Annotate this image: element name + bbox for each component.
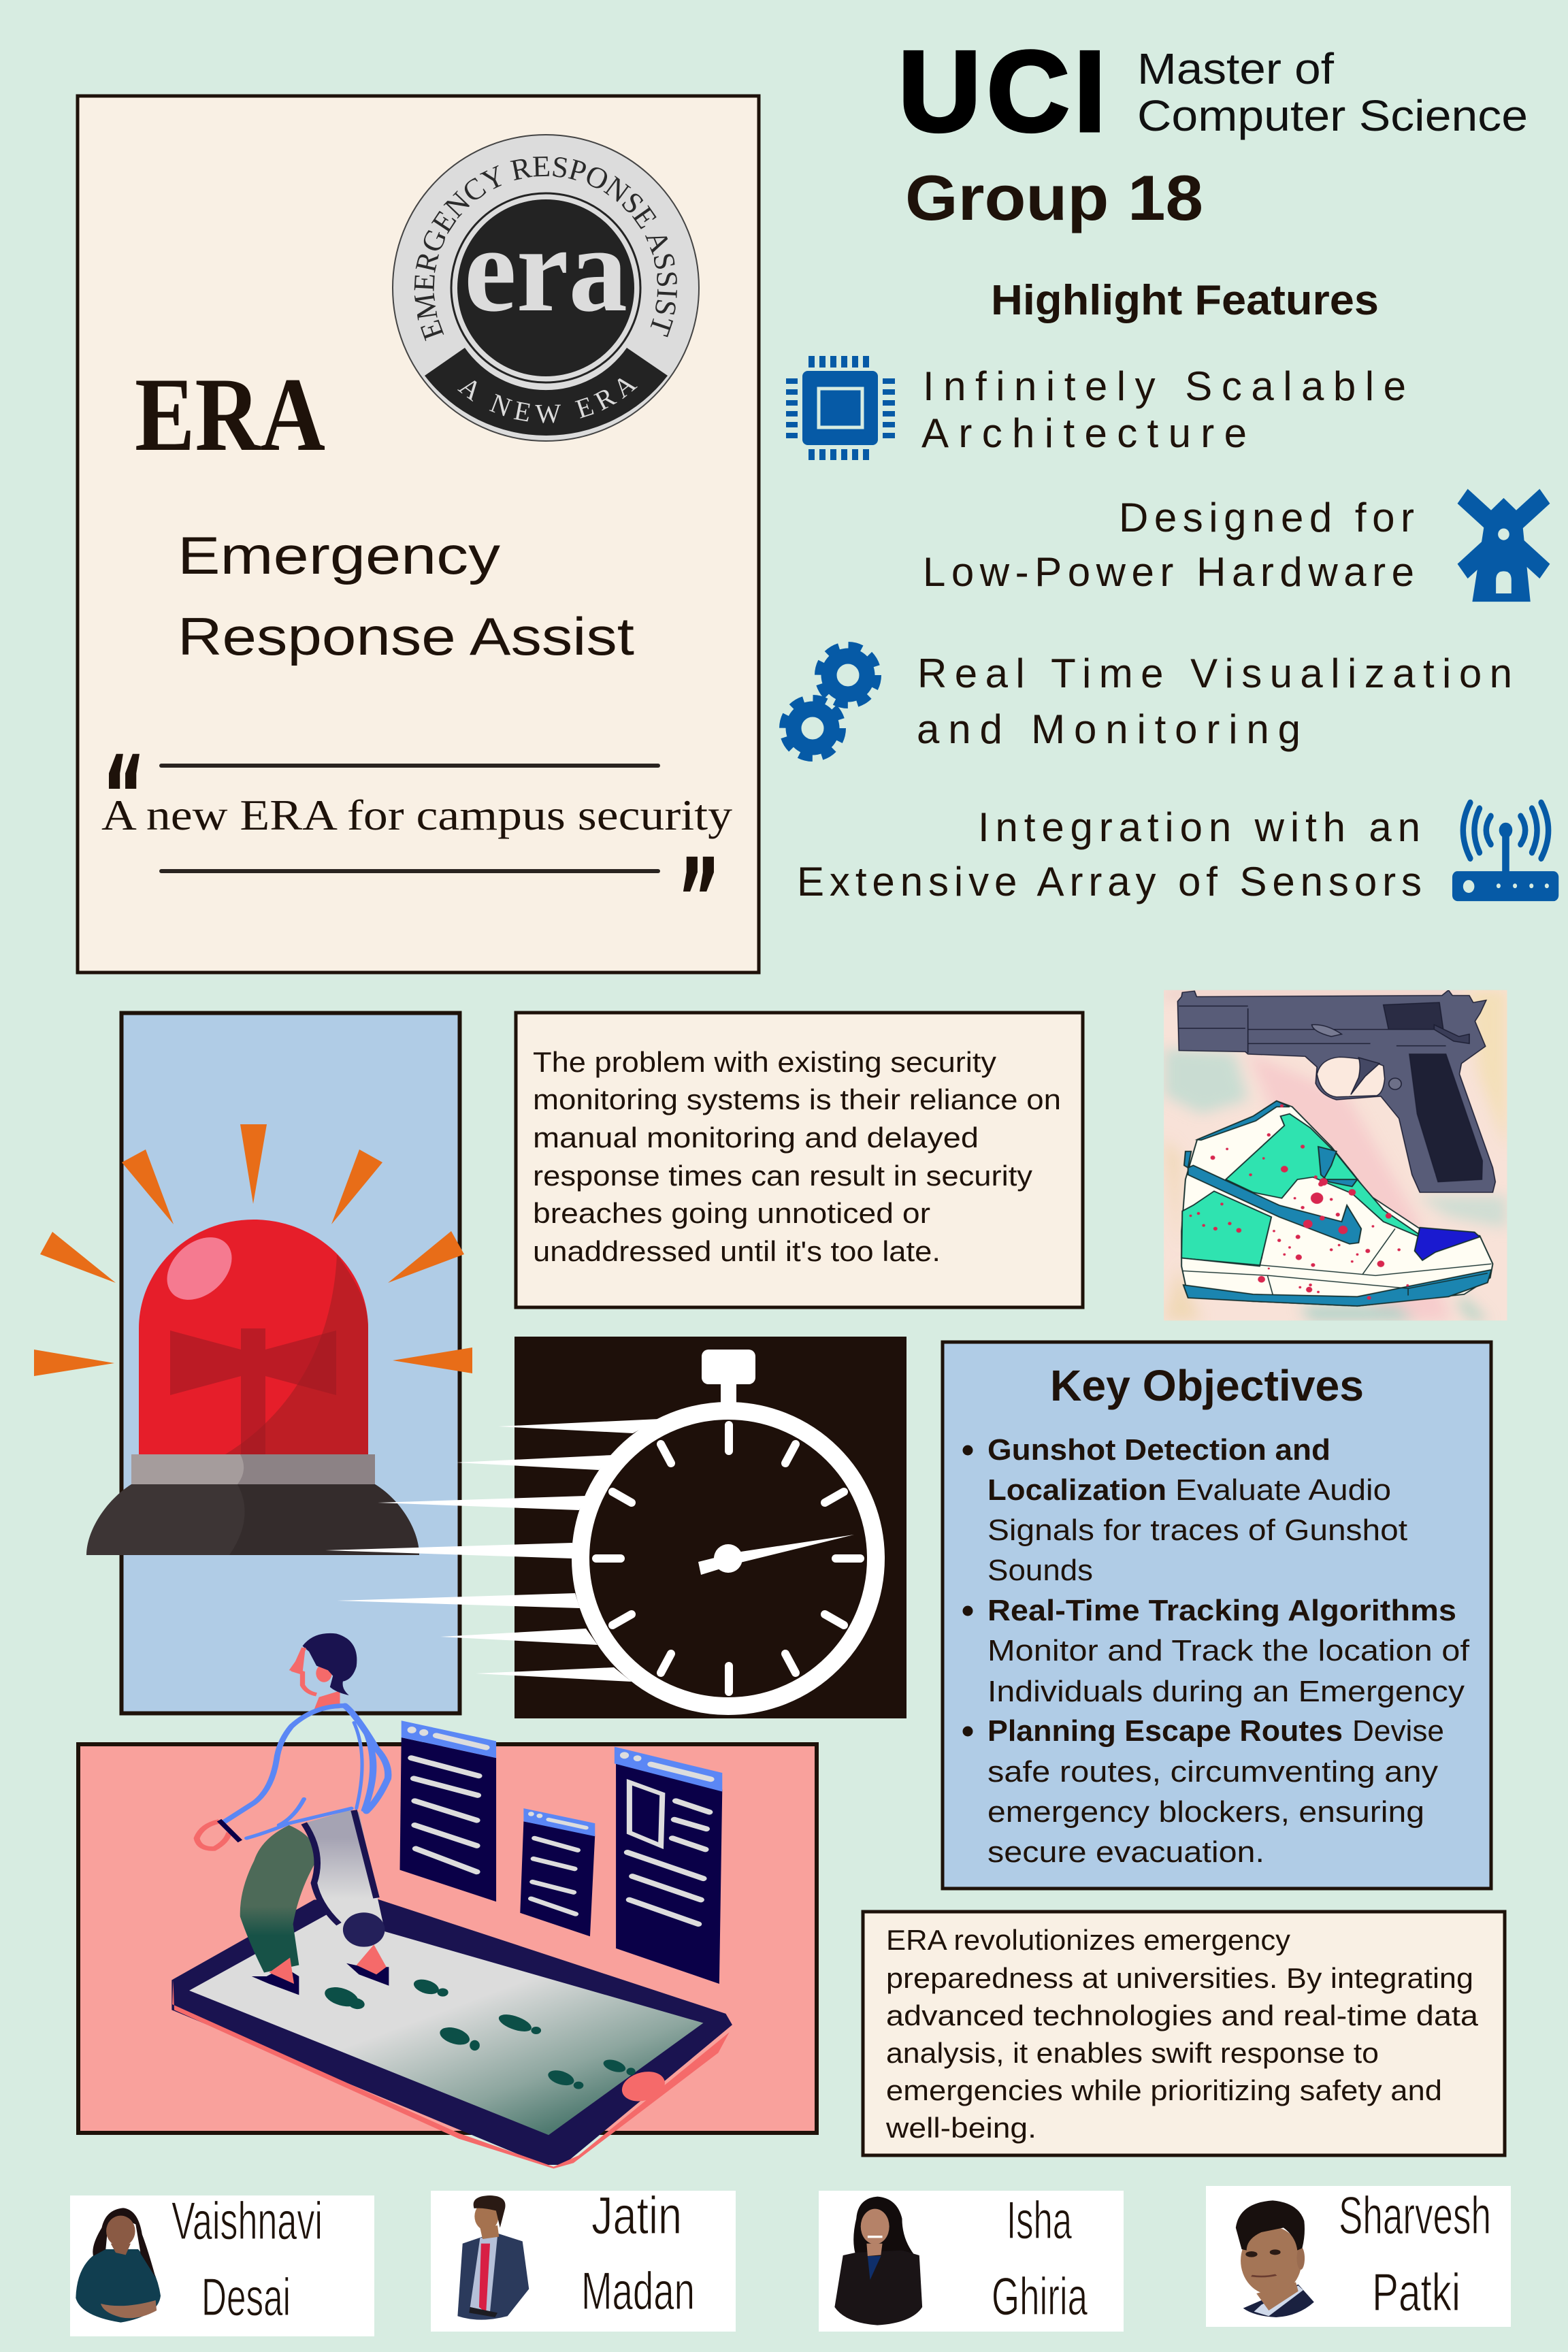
objectives list: secure evacuation. bbox=[987, 1835, 1264, 1869]
sneaker bbox=[1181, 1101, 1492, 1306]
person bbox=[197, 1633, 389, 1995]
name text: Madan bbox=[581, 2261, 695, 2321]
panel: conclusion: preparedness at universities. By integrating bbox=[886, 1962, 1473, 1994]
name text bbox=[581, 2185, 695, 2321]
feature: low-power hardware bbox=[923, 495, 1545, 602]
logo: era badge: EMERGENCY RESPONSE ASSIST bbox=[414, 157, 677, 342]
icon: router bbox=[1452, 802, 1558, 901]
text: infinitely scalable architecture: Architecture bbox=[921, 410, 1251, 456]
name text: Desai bbox=[201, 2267, 291, 2327]
name card: Jatin Madan bbox=[431, 2185, 736, 2332]
subtitle: Emergency Response Assist bbox=[178, 525, 634, 666]
text: real time visualization and monitoring: Real Time Visualization bbox=[917, 651, 1516, 696]
panel: stopwatch bbox=[325, 1337, 906, 1718]
panel: key objectives bbox=[943, 1342, 1491, 1889]
panel: conclusion: advanced technologies and real-time data bbox=[886, 1999, 1479, 2031]
panel: problem statement: The problem with existing security bbox=[533, 1046, 996, 1078]
heading: Group 18: Group 18 bbox=[905, 162, 1203, 233]
name text: Vaishnavi bbox=[172, 2191, 323, 2251]
panel: problem statement: monitoring systems is their reliance on bbox=[533, 1083, 1061, 1115]
portrait bbox=[457, 2195, 529, 2320]
objectives list: Signals for traces of Gunshot bbox=[987, 1514, 1407, 1547]
logo: UCI Master of Computer Science: Computer Science bbox=[1137, 91, 1528, 140]
name text: Jatin bbox=[591, 2185, 682, 2245]
panel: problem statement: response times can result in security bbox=[533, 1160, 1032, 1192]
feature: real time visualization bbox=[783, 646, 1516, 757]
text: designed for low-power hardware: Designed for bbox=[1119, 495, 1418, 540]
person legs bbox=[240, 1810, 389, 1995]
name card: Sharvesh Patki bbox=[1206, 2185, 1511, 2327]
name text: Ghiria bbox=[992, 2266, 1088, 2326]
illustration: person walking on a phone bbox=[172, 1633, 732, 2168]
logo: UCI Master of Computer Science: Master of bbox=[1137, 44, 1334, 93]
name text: Isha bbox=[1007, 2190, 1072, 2250]
panel: conclusion bbox=[863, 1912, 1505, 2155]
blood splatter bbox=[1190, 1105, 1409, 1300]
objectives list: Monitor and Track the location of bbox=[987, 1634, 1470, 1667]
panel: problem statement: breaches going unnoticed or bbox=[533, 1197, 930, 1229]
stopwatch speed lines bbox=[325, 1419, 659, 1682]
text: infinitely scalable architecture bbox=[921, 363, 1410, 456]
tagline quote: ” bbox=[677, 834, 721, 965]
siren light rays bbox=[34, 1124, 472, 1376]
panel: problem statement bbox=[516, 1013, 1083, 1307]
app windows bbox=[400, 1720, 722, 1984]
panel: conclusion: analysis, it enables swift response to bbox=[886, 2037, 1379, 2069]
footprints bbox=[321, 1976, 636, 2089]
name card: Isha Ghiria bbox=[819, 2190, 1124, 2332]
objectives list: safe routes, circumventing any bbox=[987, 1755, 1438, 1788]
objectives list bbox=[962, 1433, 1470, 1869]
stopwatch dial bbox=[581, 1350, 876, 1706]
portrait bbox=[1236, 2200, 1314, 2317]
name text bbox=[1339, 2185, 1491, 2322]
phone bbox=[172, 1898, 732, 2168]
person hand bbox=[197, 1820, 240, 1848]
heading: Key Objectives: Key Objectives bbox=[1050, 1361, 1364, 1410]
objectives list: Localization bbox=[987, 1473, 1166, 1507]
image: pistol and sneaker illustration bbox=[1164, 990, 1507, 1320]
feature: sensor integration bbox=[797, 802, 1558, 904]
objectives list: Evaluate Audio bbox=[1175, 1473, 1391, 1507]
siren base bbox=[86, 1484, 419, 1555]
text: designed for low-power hardware bbox=[923, 495, 1418, 595]
objectives list: Devise bbox=[1352, 1714, 1444, 1748]
icon: chip bbox=[786, 356, 895, 460]
objectives list: Sounds bbox=[987, 1554, 1093, 1587]
icon: gears bbox=[783, 646, 877, 757]
objectives list: Individuals during an Emergency bbox=[987, 1675, 1465, 1708]
text: designed for low-power hardware: Low-Power Hardware bbox=[923, 549, 1418, 595]
logo: era badge: A NEW ERA bbox=[457, 378, 638, 423]
panel: problem statement: manual monitoring and delayed bbox=[533, 1122, 979, 1154]
icon: windmill bbox=[1463, 496, 1545, 602]
name text: Patki bbox=[1372, 2262, 1460, 2322]
heading: Highlight Features: Highlight Features bbox=[991, 277, 1379, 324]
objectives list: Real-Time Tracking Algorithms bbox=[987, 1594, 1456, 1627]
text: integration with extensive sensors: Integration with an bbox=[978, 804, 1424, 850]
text: infinitely scalable architecture: Infinitely Scalable bbox=[923, 363, 1410, 409]
subtitle: Emergency Response Assist: Response Assist bbox=[178, 606, 634, 666]
person sweater bbox=[223, 1705, 388, 1838]
portrait bbox=[76, 2208, 161, 2323]
text: real time visualization and monitoring bbox=[917, 651, 1516, 752]
icon: red siren bbox=[34, 1124, 472, 1555]
panel: conclusion: ERA revolutionizes emergency bbox=[886, 1924, 1290, 1956]
panel: problem statement: unaddressed until it's too late. bbox=[533, 1235, 941, 1267]
panel: pink illustration background bbox=[78, 1744, 817, 2133]
portrait bbox=[834, 2197, 922, 2325]
tagline quote: A new ERA for campus security bbox=[101, 791, 732, 839]
tagline quote bbox=[101, 732, 732, 965]
text: integration with extensive sensors bbox=[797, 804, 1426, 904]
objectives list: emergency blockers, ensuring bbox=[987, 1795, 1424, 1829]
name card: Vaishnavi Desai bbox=[70, 2191, 374, 2336]
logo: UCI Master of Computer Science bbox=[898, 27, 1528, 155]
panel: ERA title card bbox=[76, 94, 761, 975]
pistol bbox=[1177, 990, 1495, 1192]
name text bbox=[172, 2191, 323, 2327]
objectives list: Planning Escape Routes bbox=[987, 1714, 1343, 1748]
logo: era badge: era bbox=[464, 201, 627, 337]
heading: ERA: ERA bbox=[135, 356, 325, 473]
siren band bbox=[131, 1454, 375, 1484]
logo: era badge bbox=[392, 134, 700, 442]
person head bbox=[289, 1633, 357, 1710]
panel: siren background bbox=[121, 1013, 460, 1714]
text: integration with extensive sensors: Extensive Array of Sensors bbox=[797, 859, 1426, 904]
subtitle: Emergency Response Assist: Emergency bbox=[178, 525, 500, 585]
logo: UCI Master of Computer Science: UCI bbox=[898, 27, 1106, 155]
name text bbox=[992, 2190, 1088, 2326]
panel: conclusion: well-being. bbox=[885, 2112, 1036, 2144]
tagline quote: “ bbox=[102, 732, 146, 862]
objectives list: Gunshot Detection and bbox=[987, 1433, 1330, 1467]
panel: conclusion: emergencies while prioritizing safety and bbox=[886, 2074, 1442, 2106]
siren dome bbox=[139, 1220, 368, 1454]
feature: scalable architecture bbox=[786, 356, 1410, 460]
text: real time visualization and monitoring: and Monitoring bbox=[917, 706, 1305, 752]
name text: Sharvesh bbox=[1339, 2185, 1491, 2245]
